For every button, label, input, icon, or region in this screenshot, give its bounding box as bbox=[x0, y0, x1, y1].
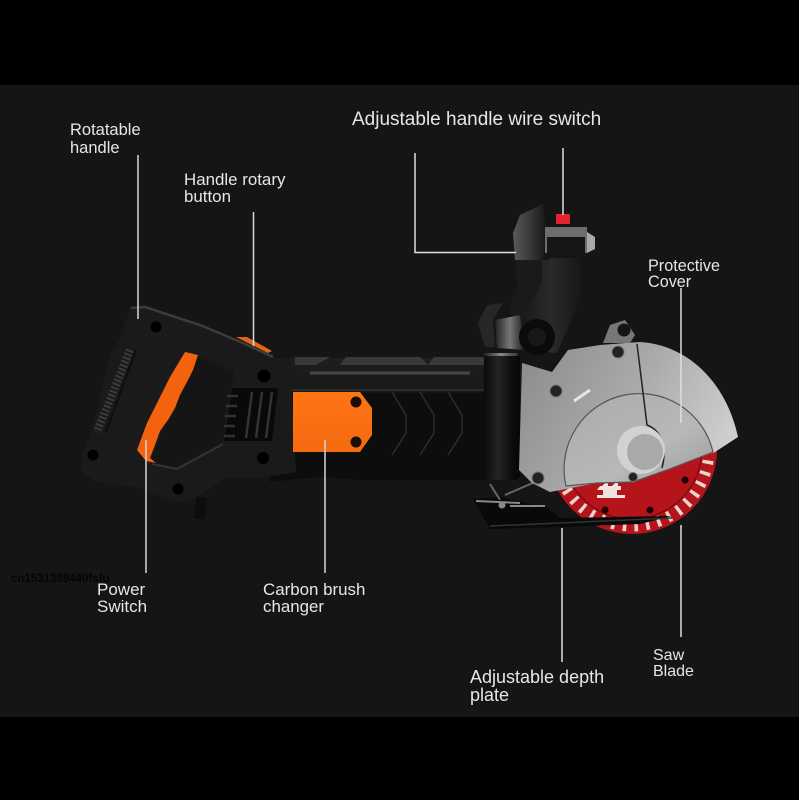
label: protective cover bbox=[648, 257, 720, 423]
background panel bbox=[0, 85, 799, 717]
label: protective cover: Protective bbox=[648, 257, 720, 275]
motor body bbox=[270, 357, 486, 482]
label: saw blade bbox=[653, 525, 694, 680]
vent grille bbox=[224, 388, 278, 441]
label: rotatable handle: handle bbox=[70, 139, 120, 157]
watermark text: cn1531389440fsfu bbox=[11, 573, 109, 585]
saw blade bbox=[547, 364, 717, 534]
label: carbon brush changer: changer bbox=[263, 597, 324, 616]
rear handle bbox=[81, 307, 296, 520]
adjustable depth base plate bbox=[473, 482, 672, 529]
orange carbon brush plate bbox=[293, 392, 372, 452]
label: power switch: Switch bbox=[97, 597, 147, 616]
label: adjustable depth plate: plate bbox=[470, 685, 509, 705]
orange rotary button bbox=[236, 337, 272, 353]
label: power switch: Power bbox=[97, 580, 146, 599]
upper adjustable handle bbox=[478, 204, 595, 355]
label: handle rotary button bbox=[184, 170, 286, 346]
label: adjustable depth plate bbox=[470, 528, 604, 705]
label: rotatable handle: Rotatable bbox=[70, 121, 141, 139]
label: saw blade: Blade bbox=[653, 663, 694, 680]
orange grip bbox=[137, 352, 198, 463]
label: adjustable depth plate: Adjustable depth bbox=[470, 667, 604, 687]
label: handle rotary button: button bbox=[184, 187, 231, 206]
label: saw blade: Saw bbox=[653, 647, 685, 664]
protective cover bbox=[519, 320, 738, 492]
label: adjustable handle wire switch: Adjustable handle wire switch bbox=[352, 109, 601, 130]
label: carbon brush changer bbox=[263, 440, 365, 616]
label: protective cover: Cover bbox=[648, 273, 692, 291]
front collar bbox=[484, 353, 520, 480]
label: adjustable handle wire switch bbox=[352, 109, 601, 252]
label: carbon brush changer: Carbon brush bbox=[263, 580, 365, 599]
label: handle rotary button: Handle rotary bbox=[184, 170, 286, 189]
label: power switch bbox=[97, 440, 147, 616]
label: rotatable handle bbox=[70, 121, 141, 319]
